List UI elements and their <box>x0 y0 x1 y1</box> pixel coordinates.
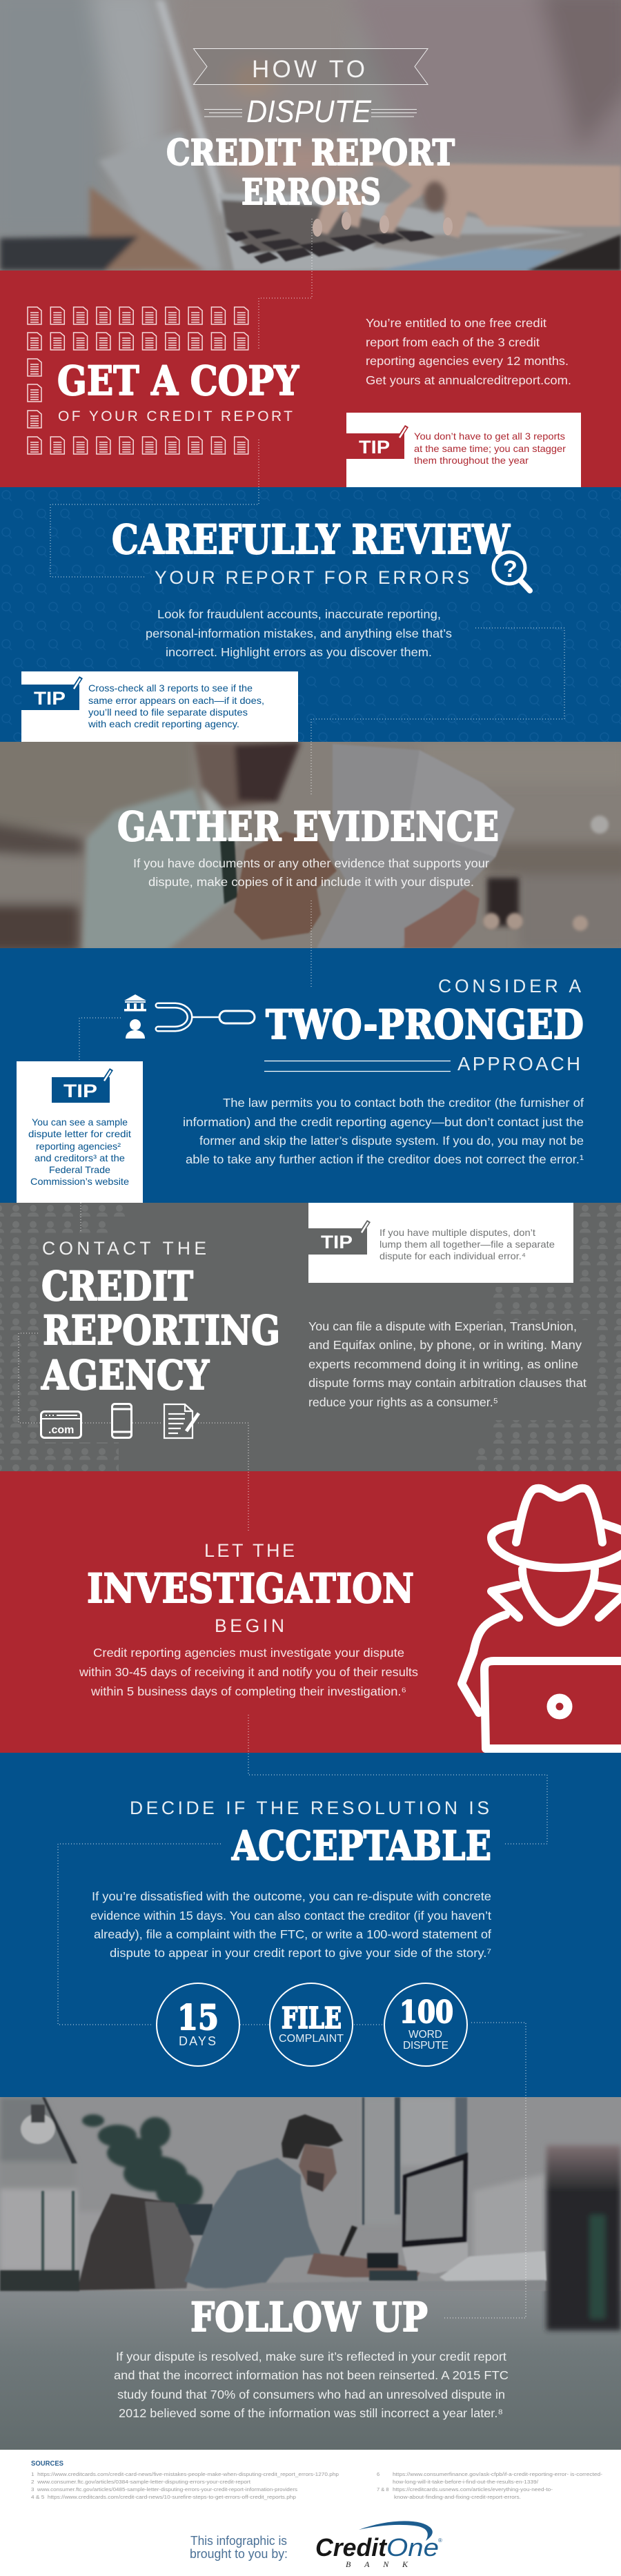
photo: hands typing on laptop <box>0 0 621 271</box>
panel: two-pronged approach <box>0 948 621 1203</box>
dotted connector path <box>19 219 564 2318</box>
heading: decide if the resolution is acceptable: ACCEPTABLE <box>231 1822 491 1869</box>
sources list: left column: 1 https://www.creditcards.com/credit-card-news/five-mistakes-people-make-when-disputing-credit_report_errors-1270.php <box>31 2471 339 2477</box>
text block: ways to file: reduce your rights as a consumer.⁵ <box>308 1395 498 1409</box>
heading: contact the credit reporting agency: AGENCY <box>41 1352 210 1399</box>
stat circle: 100 word dispute: DISPUTE <box>403 2040 448 2052</box>
sources list: left column: 3 www.consumer.ftc.gov/articles/0485-sample-letter-disputing-errors-your-credit-report-information-providers <box>31 2486 297 2493</box>
stat circle: file complaint <box>270 1983 353 2066</box>
text block: ways to file: and Equifax online, by phone, or in writing. Many <box>308 1338 582 1352</box>
tip callout <box>17 1061 143 1203</box>
heading: two-pronged approach: TWO-PRONGED <box>266 1001 584 1048</box>
tip callout: TIP <box>63 1081 97 1101</box>
title: credit report errors <box>166 132 455 213</box>
tip callout: You can see a sample <box>32 1117 128 1128</box>
text block: ways to file <box>308 1319 586 1409</box>
icon: website <box>41 1412 81 1438</box>
subheading: OF YOUR CREDIT REPORT <box>58 409 293 424</box>
title: credit report errors: ERRORS <box>241 172 381 213</box>
tip callout: dispute for each individual error.⁴ <box>379 1250 526 1261</box>
text block: follow up details: and that the incorrect information has not been reinserted. A 2015 FTC <box>114 2368 509 2382</box>
heading: contact the credit reporting agency: CONTACT THE <box>42 1238 206 1259</box>
text block: free credit report <box>366 316 571 387</box>
sources list: right column: know-about-finding-and-fixing-credit-report-errors. <box>394 2494 521 2500</box>
icon: magnifying glass <box>493 552 530 591</box>
tip callout: same error appears on each—if it does, <box>88 695 264 706</box>
text block: options: evidence within 15 days. You can also contact the creditor (if you haven’t <box>90 1909 491 1923</box>
panel: footer <box>0 2450 621 2576</box>
icon grid: documents <box>28 307 248 454</box>
heading: two-pronged approach: APPROACH <box>457 1053 580 1074</box>
text block: the law: information) and the credit reporting agency—but don’t contact just the <box>183 1115 584 1129</box>
sources list: right column: how-long-will-it-take-before-i-find-out-the-results-en-1339/ <box>393 2479 539 2485</box>
tip callout <box>308 1203 573 1283</box>
heading: decide if the resolution is acceptable <box>130 1798 491 1869</box>
panel: carefully review <box>0 487 621 742</box>
text block: the law: able to take any further action if the creditor does not correct the error.¹ <box>186 1152 584 1166</box>
text block: follow up details: study found that 70% of consumers who had an unresolved dispute in <box>117 2388 505 2401</box>
panel: decide if the resolution is acceptable <box>0 1753 621 2097</box>
sponsor line: This infographic is <box>190 2534 287 2548</box>
text block: what to look for: Look for fraudulent accounts, inaccurate reporting, <box>157 607 441 621</box>
heading: decide if the resolution is acceptable: DECIDE IF THE RESOLUTION IS <box>130 1798 489 1818</box>
text block: follow up details: 2012 believed some of the information was still incorrect a year later.⁸ <box>119 2406 503 2420</box>
stat circle: file complaint: COMPLAINT <box>279 2033 344 2045</box>
heading: contact the credit reporting agency <box>41 1238 280 1399</box>
title: dispute <box>204 94 417 129</box>
text block: what to look for <box>146 607 452 659</box>
stat circle: 15 days: 15 <box>177 1997 219 2038</box>
heading: let the investigation begin: LET THE <box>204 1540 295 1561</box>
heading: let the investigation begin <box>87 1540 414 1636</box>
sources list: left column: 2 www.consumer.ftc.gov/articles/0384-sample-letter-disputing-errors-your-credit-report <box>31 2479 251 2485</box>
text block: free credit report: reporting agencies every 12 months. <box>366 354 569 368</box>
tip callout <box>346 413 581 487</box>
logo: Credit One Bank: One <box>386 2533 439 2562</box>
tip callout: at the same time; you can stagger <box>414 443 566 454</box>
panel: get a copy <box>0 271 621 487</box>
text block: investigation timing: Credit reporting agencies must investigate your dispute <box>93 1646 404 1660</box>
text block: ways to file: dispute forms may contain arbitration clauses that <box>308 1376 586 1390</box>
heading: follow up: FOLLOW UP <box>190 2294 428 2341</box>
sources list: right column <box>377 2471 603 2500</box>
icon: person <box>126 1019 145 1039</box>
text block: ways to file: experts recommend doing it in writing, as online <box>308 1357 578 1371</box>
sponsor line <box>190 2534 288 2561</box>
text block: the law: former and skip the latter’s dispute system. If you do, you may not be <box>199 1134 584 1148</box>
text block: free credit report: You’re entitled to one free credit <box>366 316 546 330</box>
title banner: how to <box>193 48 428 84</box>
heading: get a copy: GET A COPY <box>57 357 299 404</box>
sources list: left column <box>31 2471 339 2500</box>
sources list: right column: 6 <box>377 2471 379 2477</box>
title: dispute: DISPUTE <box>246 94 372 129</box>
tip callout: You don’t have to get all 3 reports <box>414 431 565 442</box>
stat circle: file complaint: FILE <box>282 2001 342 2035</box>
sources list: right column: 7 & 8 <box>377 2486 389 2493</box>
text block: follow up details <box>114 2350 509 2420</box>
stat circle: 15 days <box>157 1983 239 2066</box>
tip callout: TIP <box>321 1232 353 1252</box>
title banner: how to: HOW TO <box>252 56 365 83</box>
text block: options: dispute to appear in your credit report to give your side of the story.⁷ <box>110 1946 491 1960</box>
tip callout: Federal Trade <box>49 1164 110 1175</box>
icon: written document <box>164 1404 199 1438</box>
text block: investigation timing <box>79 1646 418 1698</box>
icon: two-pronged fork <box>158 1005 255 1029</box>
sponsor line: brought to you by: <box>190 2547 288 2561</box>
heading: let the investigation begin: BEGIN <box>215 1615 284 1636</box>
icon: website: .com <box>48 1424 74 1436</box>
stat circle: 100 word dispute: 100 <box>400 1995 453 2030</box>
text block: ways to file: You can file a dispute with Experian, TransUnion, <box>308 1319 577 1333</box>
text block: what to look for: personal-information mistakes, and anything else that’s <box>146 627 452 640</box>
text block: free credit report: report from each of the 3 credit <box>366 335 540 349</box>
heading: let the investigation begin: INVESTIGATION <box>87 1565 414 1612</box>
tip callout: Commission’s website <box>30 1176 129 1187</box>
logo: Credit One Bank: ® <box>438 2537 442 2544</box>
text block: evidence: dispute, make copies of it and include it with your dispute. <box>148 875 474 889</box>
stat circle: 15 days: DAYS <box>179 2034 216 2048</box>
tip callout: dispute letter for credit <box>28 1128 131 1139</box>
stat circle: 100 word dispute <box>384 1983 467 2066</box>
photo: man reading documents <box>0 731 621 952</box>
tip callout: with each credit reporting agency. <box>88 718 239 729</box>
icon: detective at laptop <box>462 1488 621 1749</box>
heading: two-pronged approach: CONSIDER A <box>438 976 581 996</box>
sources heading: SOURCES <box>31 2459 63 2468</box>
text block: what to look for: incorrect. Highlight errors as you discover them. <box>166 645 432 659</box>
panel: contact the credit reporting agency <box>0 1203 621 1471</box>
title: credit report errors: CREDIT REPORT <box>166 132 455 174</box>
text block: options: If you’re dissatisfied with the outcome, you can re-dispute with concrete <box>92 1889 491 1903</box>
panel: gather evidence <box>0 731 621 952</box>
tip callout: and creditors³ at the <box>34 1152 125 1163</box>
logo: Credit One Bank: Credit <box>315 2533 388 2562</box>
heading: contact the credit reporting agency: CREDIT <box>41 1263 193 1310</box>
icon: bank <box>124 994 146 1012</box>
tip callout: TIP <box>34 688 66 709</box>
sources list: left column: 4 & 5 https://www.creditcards.com/credit-card-news/10-surefire-steps-to-get-errors-off-credit_reports.php <box>31 2494 296 2500</box>
text block: follow up details: If your dispute is resolved, make sure it’s reflected in your credit report <box>116 2350 506 2363</box>
text block: options <box>90 1889 491 1960</box>
text block: investigation timing: within 30-45 days of receiving it and notify you of their results <box>79 1665 418 1679</box>
tip callout: you’ll need to file separate disputes <box>88 707 248 718</box>
heading: two-pronged approach <box>264 976 584 1074</box>
icon: phone <box>112 1404 131 1438</box>
tip callout <box>21 671 298 742</box>
logo: Credit One Bank: BANK <box>346 2559 408 2569</box>
heading: contact the credit reporting agency: REPORTING <box>43 1307 280 1354</box>
panel: follow up <box>0 2097 621 2453</box>
sources list: right column: https://creditcards.usnews.com/articles/everything-you-need-to- <box>393 2486 553 2493</box>
text block: the law: The law permits you to contact both the creditor (the furnisher of <box>223 1096 584 1110</box>
sources list: right column: https://www.consumerfinance.gov/ask-cfpb/if-a-credit-reporting-error- is-corrected- <box>393 2471 603 2477</box>
text block: evidence: If you have documents or any other evidence that supports your <box>133 856 489 870</box>
text block: evidence <box>133 856 489 889</box>
tip callout: reporting agencies² <box>36 1141 121 1152</box>
tip callout: lump them all together—file a separate <box>379 1239 555 1250</box>
stat circle: 100 word dispute: WORD <box>408 2029 442 2041</box>
tip callout: Cross-check all 3 reports to see if the <box>88 682 253 694</box>
tip callout: TIP <box>359 437 390 458</box>
photo: man working at desk <box>0 2097 621 2453</box>
text block: free credit report: Get yours at annualcreditreport.com. <box>366 373 571 387</box>
logo: Credit One Bank <box>315 2521 442 2569</box>
tip callout: them throughout the year <box>414 455 529 466</box>
text block: options: already), file a complaint with the FTC, or write a 100-word statement of <box>94 1927 491 1941</box>
panel: let the investigation begin <box>0 1471 621 1753</box>
text block: investigation timing: within 5 business days of completing their investigation.⁶ <box>90 1684 406 1698</box>
subheading: YOUR REPORT FOR ERRORS <box>155 567 469 588</box>
tip callout: If you have multiple disputes, don’t <box>379 1227 535 1238</box>
heading: gather evidence: GATHER EVIDENCE <box>117 803 499 850</box>
text block: the law <box>183 1096 584 1166</box>
icon: magnifying glass: ? <box>503 556 518 582</box>
panel: hero photo with title <box>0 0 621 271</box>
heading: carefully review: CAREFULLY REVIEW <box>112 516 511 563</box>
